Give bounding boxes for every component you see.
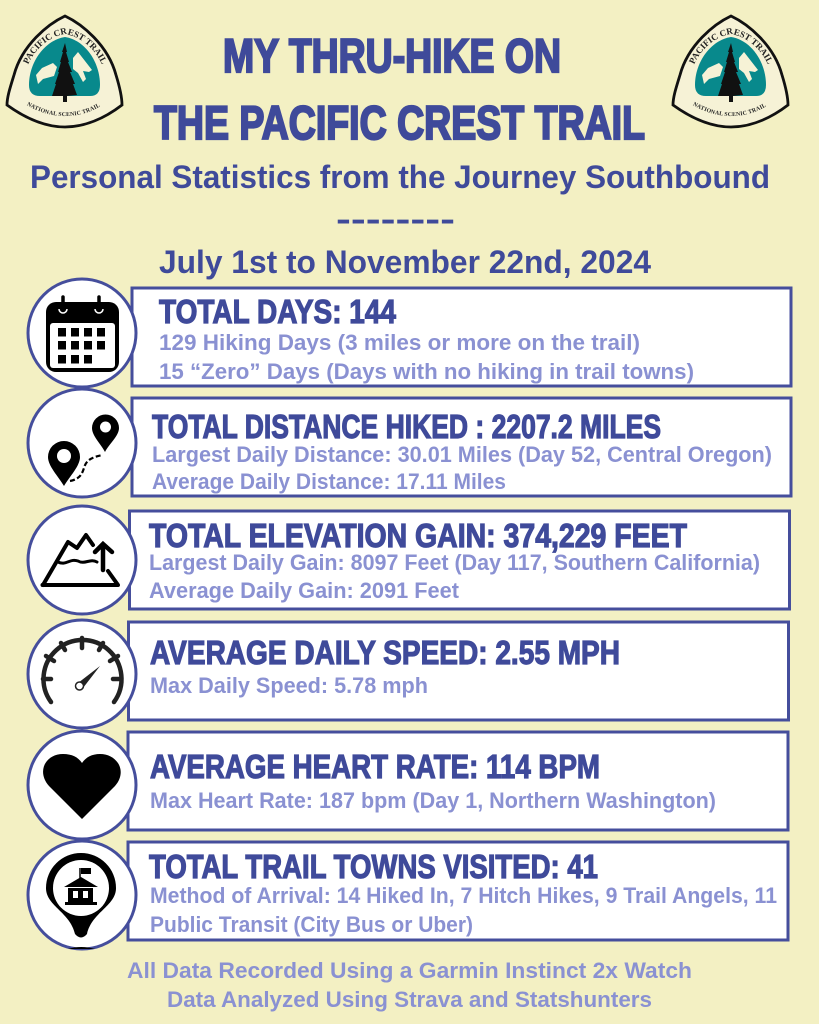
logo: left PCT shield: PACIFIC CREST TRAIL (22, 28, 106, 64)
logo: right PCT shield (672, 14, 790, 128)
heading: speed: AVERAGE DAILY SPEED: 2.55 MPH (150, 634, 620, 671)
footer line 1: All Data Recorded Using a Garmin Instinct 2x Watch (127, 958, 692, 983)
icon: map pins with dashed route (28, 389, 136, 497)
text: largest daily gain: Largest Daily Gain: 8097 Feet (Day 117, Southern California) (149, 550, 760, 575)
text: method of arrival: Method of Arrival: 14 Hiked In, 7 Hitch Hikes, 9 Trail Angels, 11 (150, 883, 777, 908)
logo: left PCT shield (6, 14, 124, 128)
date range: July 1st to November 22nd, 2024 (159, 244, 651, 280)
text: average daily distance: Average Daily Distance: 17.11 Miles (152, 469, 506, 494)
title line 2: THE PACIFIC CREST TRAIL (154, 96, 645, 149)
panel: trail towns (128, 842, 788, 940)
text: largest daily distance: Largest Daily Distance: 30.01 Miles (Day 52, Central Oregon) (152, 442, 772, 467)
text: hiking days: 129 Hiking Days (3 miles or more on the trail) (159, 330, 640, 355)
text: max speed: Max Daily Speed: 5.78 mph (150, 673, 428, 698)
footer line 2: Data Analyzed Using Strava and Statshunters (167, 987, 652, 1012)
text: max heart rate: Max Heart Rate: 187 bpm (Day 1, Northern Washington) (150, 788, 716, 813)
dashes divider text: -------- (336, 201, 455, 237)
subtitle: Personal Statistics from the Journey Southbound (30, 159, 770, 195)
heading: total days: TOTAL DAYS: 144 (159, 293, 397, 330)
title line 1: MY THRU-HIKE ON (223, 29, 561, 82)
panel: heart rate (128, 732, 788, 830)
heading: trail towns: TOTAL TRAIL TOWNS VISITED: 41 (149, 848, 598, 885)
panel: elevation gain (130, 511, 790, 609)
panel: total distance (132, 398, 791, 496)
logo: right PCT shield: PACIFIC CREST TRAIL (688, 28, 772, 64)
icon: speedometer gauge (28, 620, 136, 728)
icon: mountain with up arrow (28, 506, 136, 614)
panel: total days (132, 288, 791, 386)
icon: location pin with school house (28, 841, 136, 949)
heading: total distance: TOTAL DISTANCE HIKED : 2207.2 MILES (152, 408, 661, 445)
logo: left PCT shield: NATIONAL SCENIC TRAIL (26, 102, 100, 116)
text: zero days: 15 “Zero” Days (Days with no hiking in trail towns) (159, 359, 694, 384)
icon: calendar (28, 279, 136, 387)
logo: right PCT shield: NATIONAL SCENIC TRAIL (692, 102, 766, 116)
heading: elevation gain: TOTAL ELEVATION GAIN: 374,229 FEET (149, 517, 687, 554)
icon: heart (28, 731, 136, 839)
text: public transit: Public Transit (City Bus or Uber) (150, 912, 473, 937)
heading: heart rate: AVERAGE HEART RATE: 114 BPM (150, 748, 600, 785)
panel: speed (128, 622, 788, 720)
text: average daily gain: Average Daily Gain: 2091 Feet (149, 578, 460, 603)
